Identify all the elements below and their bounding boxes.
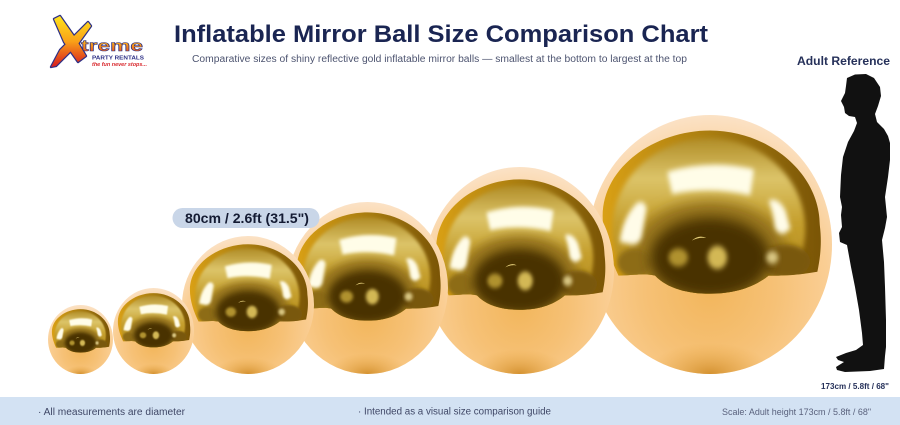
footer note: guide: · Intended as a visual size comparison guide <box>358 406 551 418</box>
title: Inflatable Mirror Ball Size Comparison Chart <box>174 21 708 48</box>
adult height label: 173cm / 5.8ft / 68" <box>821 382 889 391</box>
logo: Xtreme Party Rentals <box>51 16 147 68</box>
subtitle: Comparative sizes of shiny reflective gold inflatable mirror balls — smallest at the bottom to largest at the top <box>192 54 687 65</box>
adult reference heading: Adult Reference <box>797 54 890 68</box>
logo: Xtreme Party Rentals: the fun never stops... <box>92 62 147 68</box>
footer note: scale: Scale: Adult height 173cm / 5.8ft / 68" <box>722 407 871 418</box>
size label pill <box>172 208 320 228</box>
ball 6: largest mirror ball <box>588 115 832 405</box>
ball 1: smallest mirror ball <box>48 305 113 382</box>
ball 2: small mirror ball <box>113 288 194 384</box>
logo: Xtreme Party Rentals: treme <box>81 38 143 55</box>
ball 4: mirror ball <box>287 202 448 395</box>
footer bar <box>0 397 900 425</box>
footer note: diameter: · All measurements are diameter <box>38 407 186 418</box>
ball 3: 80cm mirror ball <box>182 236 314 391</box>
ball 5: second largest mirror ball <box>425 167 614 399</box>
size label pill: 80cm / 2.6ft (31.5") <box>185 210 309 226</box>
adult silhouette <box>836 74 890 372</box>
logo: Xtreme Party Rentals: PARTY RENTALS <box>92 56 144 62</box>
